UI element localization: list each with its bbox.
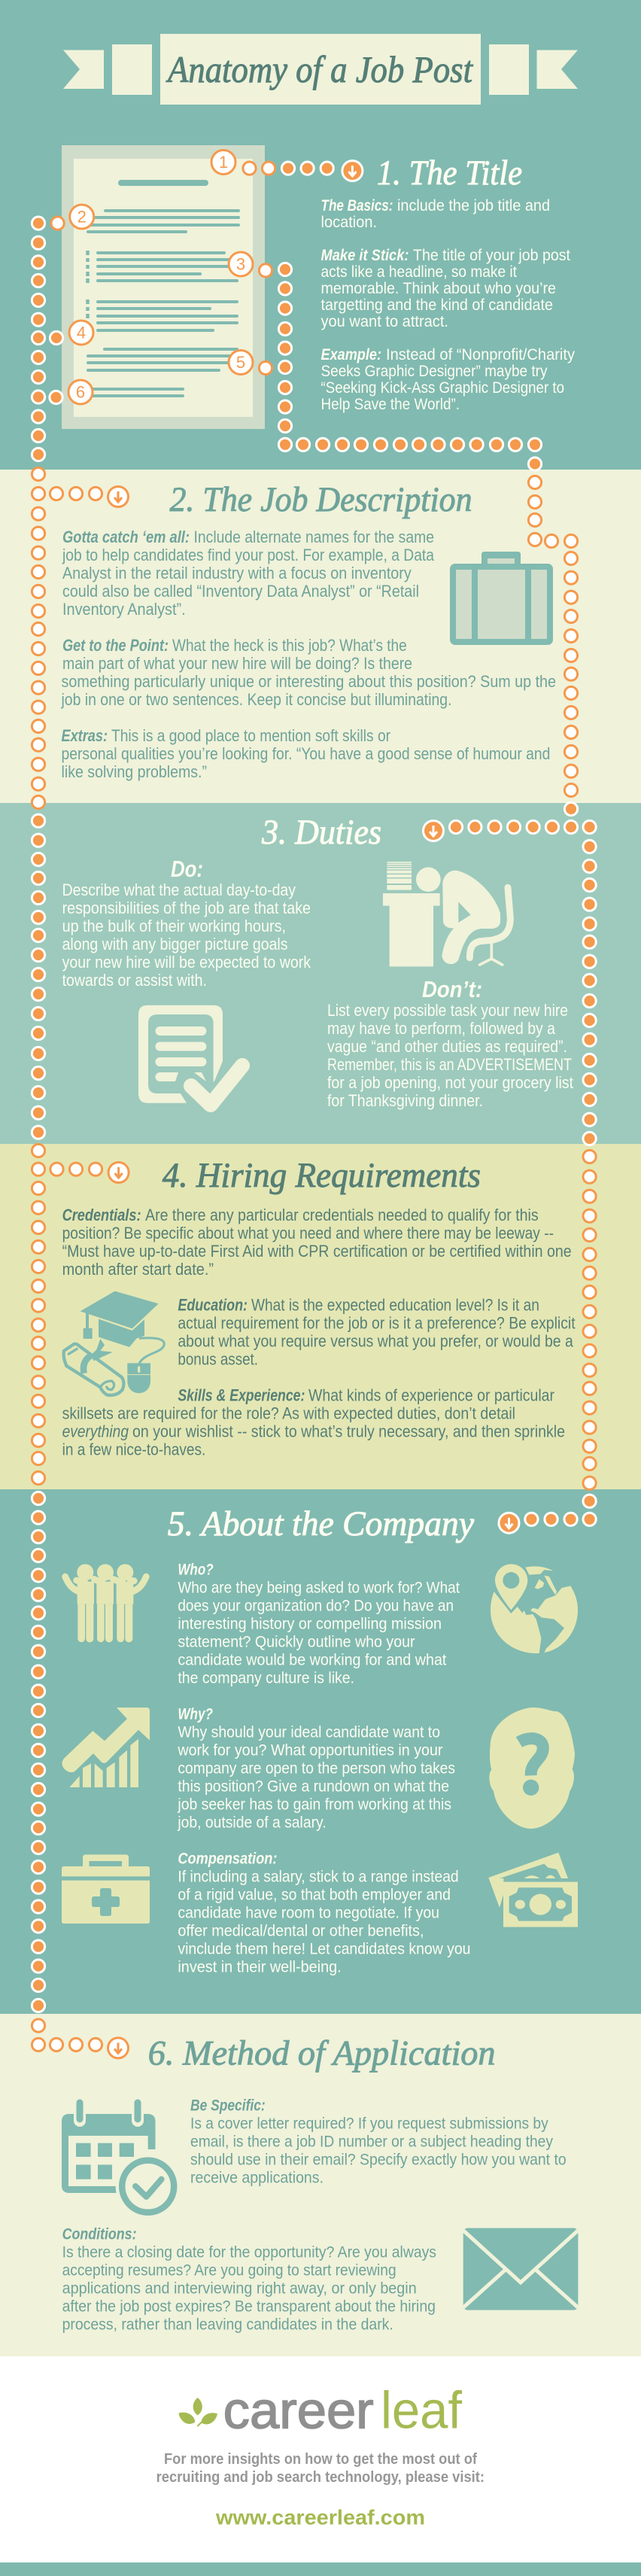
panel: footer (0, 2356, 641, 2576)
text block: who: interesting history or compelling mission (178, 1615, 442, 1633)
text block: footer message: recruiting and job search technology, please visit: (156, 2469, 485, 2486)
icon: envelope (463, 2228, 578, 2310)
heading: 4. Hiring Requirements: 4. Hiring Requirements (163, 1156, 481, 1195)
icon: location pin on globe (491, 1564, 578, 1653)
panel: method of application section (0, 2014, 641, 2356)
text block: why: this position? Give a rundown on what the (178, 1778, 449, 1796)
text block: conditions: applications and interviewing right away, or only begin (62, 2280, 417, 2297)
text block: credentials: position? Be specific about what you need and where there may be leeway -- (62, 1224, 554, 1242)
text block: Do: Do: (171, 856, 203, 882)
text block: title advice: acts like a headline, so make it (320, 263, 517, 281)
text block: why: job seeker has to gain from working at this (177, 1796, 451, 1814)
text block: who (178, 1561, 460, 1687)
text block: Do: towards or assist with. (62, 971, 207, 990)
text block: education: bonus asset. (178, 1350, 258, 1369)
text block: who: Who? (178, 1561, 214, 1579)
text block: title advice: you want to attract. (320, 313, 448, 330)
logo: careerleaf: career (223, 2382, 374, 2440)
text block: skills and experience: everything (62, 1422, 129, 1441)
icon: calendar with check (62, 2101, 181, 2219)
text block: compensation: candidate have room to negotiate. If you (178, 1904, 439, 1922)
text block: conditions: after the job post expires? Be transparent about the hiring (62, 2298, 436, 2315)
text block: who: the company culture is like. (178, 1669, 354, 1687)
logo: careerleaf (178, 2381, 463, 2440)
text block: Don't: for Thanksgiving dinner. (327, 1091, 483, 1110)
text block: education: actual requirement for the job or is it a preference? Be explicit (178, 1314, 576, 1333)
text block: skills and experience (62, 1386, 565, 1459)
text block: job description advice: Analyst in the retail industry with a focus on inventory (62, 564, 412, 582)
text block: compensation: vinclude them here! Let candidates know you (178, 1940, 471, 1958)
text block: job description advice: Get to the Point: (62, 636, 169, 655)
text block: conditions: Conditions: (62, 2226, 137, 2243)
text block: compensation: invest in their well-being. (178, 1958, 342, 1976)
text block: who: Who are they being asked to work for? What (178, 1579, 460, 1597)
panel: title section (0, 0, 641, 470)
logo: careerleaf: leaf (381, 2381, 463, 2440)
text block: who: statement? Quickly outline who your (178, 1633, 415, 1651)
text block: Do: responsibilities of the job are that take (62, 899, 311, 917)
numbered badges on document (68, 151, 253, 404)
text block: be specific: Be Specific: (190, 2097, 266, 2115)
icon: first aid case (62, 1854, 150, 1924)
text block: Do: along with any bigger picture goals (62, 935, 287, 953)
text block: Do: Describe what the actual day-to-day (62, 880, 296, 899)
icon: graduation cap, diploma and mouse (64, 1291, 164, 1395)
numbered badges on document: 2 (77, 208, 87, 226)
panel: about the company section (0, 1489, 641, 2014)
panel: hiring requirements section (0, 1144, 641, 1489)
text block: job description advice: something particularly unique or interesting about this position? Sum up the (62, 672, 556, 691)
icon: group of people (65, 1564, 146, 1642)
text block: job description advice: This is a good place to mention soft skills or (111, 726, 390, 745)
text block: compensation: offer medical/dental or other benefits, (178, 1922, 424, 1940)
text block: why: company are open to the person who takes (178, 1759, 455, 1778)
text block: Don't: for a job opening, not your grocery list (327, 1073, 573, 1092)
text block: be specific: email, is there a job ID number or a subject heading they (190, 2133, 553, 2151)
text block: job description advice: could also be called “Inventory Data Analyst” or “Retail (62, 582, 419, 601)
arrow markers on dotted paths (108, 161, 519, 2058)
icon: exhausted worker at desk (383, 862, 510, 966)
text block: why: Why? (178, 1705, 213, 1723)
text block: credentials (62, 1206, 572, 1279)
text block: Don't: Remember, this is an ADVERTISEMENT (327, 1055, 572, 1074)
title banner: Anatomy of a Job Post (166, 48, 473, 90)
heading: 2. The Job Description: 2. The Job Description (170, 480, 472, 519)
text block: Don't: may have to perform, followed by a (327, 1019, 556, 1038)
numbered badges on document: 5 (236, 353, 245, 372)
text block: Don't (327, 976, 573, 1110)
text block: footer message (156, 2451, 485, 2486)
text block: title advice: location. (320, 214, 377, 231)
text block: title advice: targetting and the kind of candidate (320, 297, 553, 314)
text block: job description advice: job in one or two sentences. Keep it concise but illuminating. (61, 690, 452, 709)
icon: growth chart arrow (62, 1708, 150, 1787)
icon: job post document (62, 145, 265, 429)
numbered badges on document: 4 (77, 324, 86, 342)
text block: title advice: Help Save the World”. (320, 396, 460, 413)
text block: why: job, outside of a salary. (177, 1814, 327, 1832)
text block: conditions: accepting resumes? Are you going to start reviewing (62, 2262, 396, 2279)
website link text: www.careerleaf.com (215, 2505, 425, 2529)
text block: skills and experience: in a few nice-to-haves. (62, 1440, 205, 1459)
text block: title advice: memorable. Think about who you’re (320, 280, 556, 297)
text block: skills and experience: Skills & Experience: (178, 1386, 305, 1405)
numbered badges on document: 3 (236, 254, 245, 274)
text block: title advice: The title of your job post (413, 247, 570, 264)
text block: title advice: Seeks Graphic Designer” maybe try (320, 363, 548, 380)
text block: job description advice: What the heck is this job? What’s the (172, 636, 407, 655)
text block: Don't: Don’t: (422, 976, 482, 1002)
panel: duties section (0, 803, 641, 1144)
text block: be specific: receive applications. (190, 2169, 324, 2187)
text block: job description advice: like solving problems.” (62, 762, 207, 781)
text block: Do: up the bulk of their working hours, (62, 917, 286, 935)
text block: education: about what you require versus what you prefer, or would be a (178, 1332, 573, 1351)
dotted connector paths (32, 162, 596, 2051)
text block: title advice: “Seeking Kick-Ass Graphic Designer to (320, 379, 564, 397)
text block: be specific: should use in their email? Specify exactly how you want to (190, 2151, 567, 2169)
text block: title advice: include the job title and (397, 197, 550, 214)
text block: Don't: vague “and other duties as required”. (327, 1037, 567, 1056)
text block: compensation (178, 1850, 471, 1976)
text block: credentials: Credentials: (62, 1206, 141, 1224)
icon: briefcase (450, 552, 553, 645)
text block: who: candidate would be working for and what (178, 1651, 447, 1669)
text block: education: What is the expected education level? Is it an (251, 1296, 539, 1315)
text block: job description advice: Gotta catch ‘em all: (62, 528, 190, 546)
text block: conditions: process, rather than leaving candidates in the dark. (62, 2316, 393, 2333)
icon: money bills (488, 1853, 578, 1927)
text block: Do: your new hire will be expected to work (62, 953, 311, 972)
text block: compensation: of a rigid value, so that both employer and (178, 1886, 451, 1904)
text block: title advice: Make it Stick: (320, 247, 409, 264)
text block: education: Education: (178, 1296, 248, 1315)
panel: job description section (0, 470, 641, 803)
text block: credentials: “Must have up-to-date First Aid with CPR certification or be certified within one (62, 1242, 572, 1261)
text block: job description advice: Extras: (62, 726, 108, 745)
numbered badges on document: 1 (219, 153, 228, 172)
text block: compensation: If including a salary, stick to a range instead (178, 1868, 459, 1886)
text block: job description advice: job to help candidates find your post. For example, a Data (62, 546, 435, 564)
icon: head with question mark (489, 1708, 575, 1829)
text block: title advice (320, 197, 575, 413)
text block: why (177, 1705, 455, 1832)
heading: 1. The Title: 1. The Title (377, 154, 522, 193)
text block: compensation: Compensation: (178, 1850, 277, 1868)
text block: be specific (190, 2097, 567, 2187)
text block: credentials: Are there any particular credentials needed to qualify for this (145, 1206, 539, 1224)
heading: 3. Duties: 3. Duties (261, 813, 381, 852)
text block: credentials: month after start date.” (62, 1260, 214, 1279)
text block: Don't: List every possible task your new hire (327, 1001, 568, 1020)
text block: job description advice: Inventory Analyst”. (62, 600, 186, 619)
text block: title advice: The Basics: (320, 197, 393, 214)
text block: education (178, 1296, 576, 1369)
text block: job description advice: Include alternate names for the same (194, 528, 434, 546)
text block: be specific: Is a cover letter required? If you request submissions by (190, 2115, 548, 2133)
text block: why: work for you? What opportunities in your (177, 1741, 443, 1759)
heading: 6. Method of Application: 6. Method of Application (148, 2033, 496, 2073)
numbered badges on document: 6 (76, 382, 85, 402)
heading: 5. About the Company: 5. About the Company (168, 1504, 474, 1543)
text block: Do (62, 856, 311, 990)
text block: skills and experience: skillsets are required for the role? As with expected duties, don’t detail (62, 1404, 515, 1423)
text block: conditions: Is there a closing date for the opportunity? Are you always (62, 2244, 436, 2261)
text block: who: does your organization do? Do you have an (178, 1597, 454, 1615)
icon: checklist document (138, 1005, 242, 1105)
title banner (63, 34, 578, 105)
text block: skills and experience: on your wishlist -- stick to what’s truly necessary, and then sprinkle (132, 1422, 565, 1441)
text block: job description advice: main part of what your new hire will be doing? Is there (62, 654, 412, 673)
text block: title advice: Example: (320, 346, 381, 363)
text block: footer message: For more insights on how to get the most out of (164, 2451, 477, 2468)
text block: job description advice (61, 528, 556, 781)
text block: job description advice: personal qualities you’re looking for. “You have a good sense of humour and (62, 744, 550, 763)
text block: skills and experience: What kinds of experience or particular (308, 1386, 554, 1405)
text block: title advice: Instead of “Nonprofit/Charity (386, 346, 575, 363)
text block: why: Why should your ideal candidate want to (178, 1723, 440, 1741)
text block: conditions (62, 2226, 436, 2333)
